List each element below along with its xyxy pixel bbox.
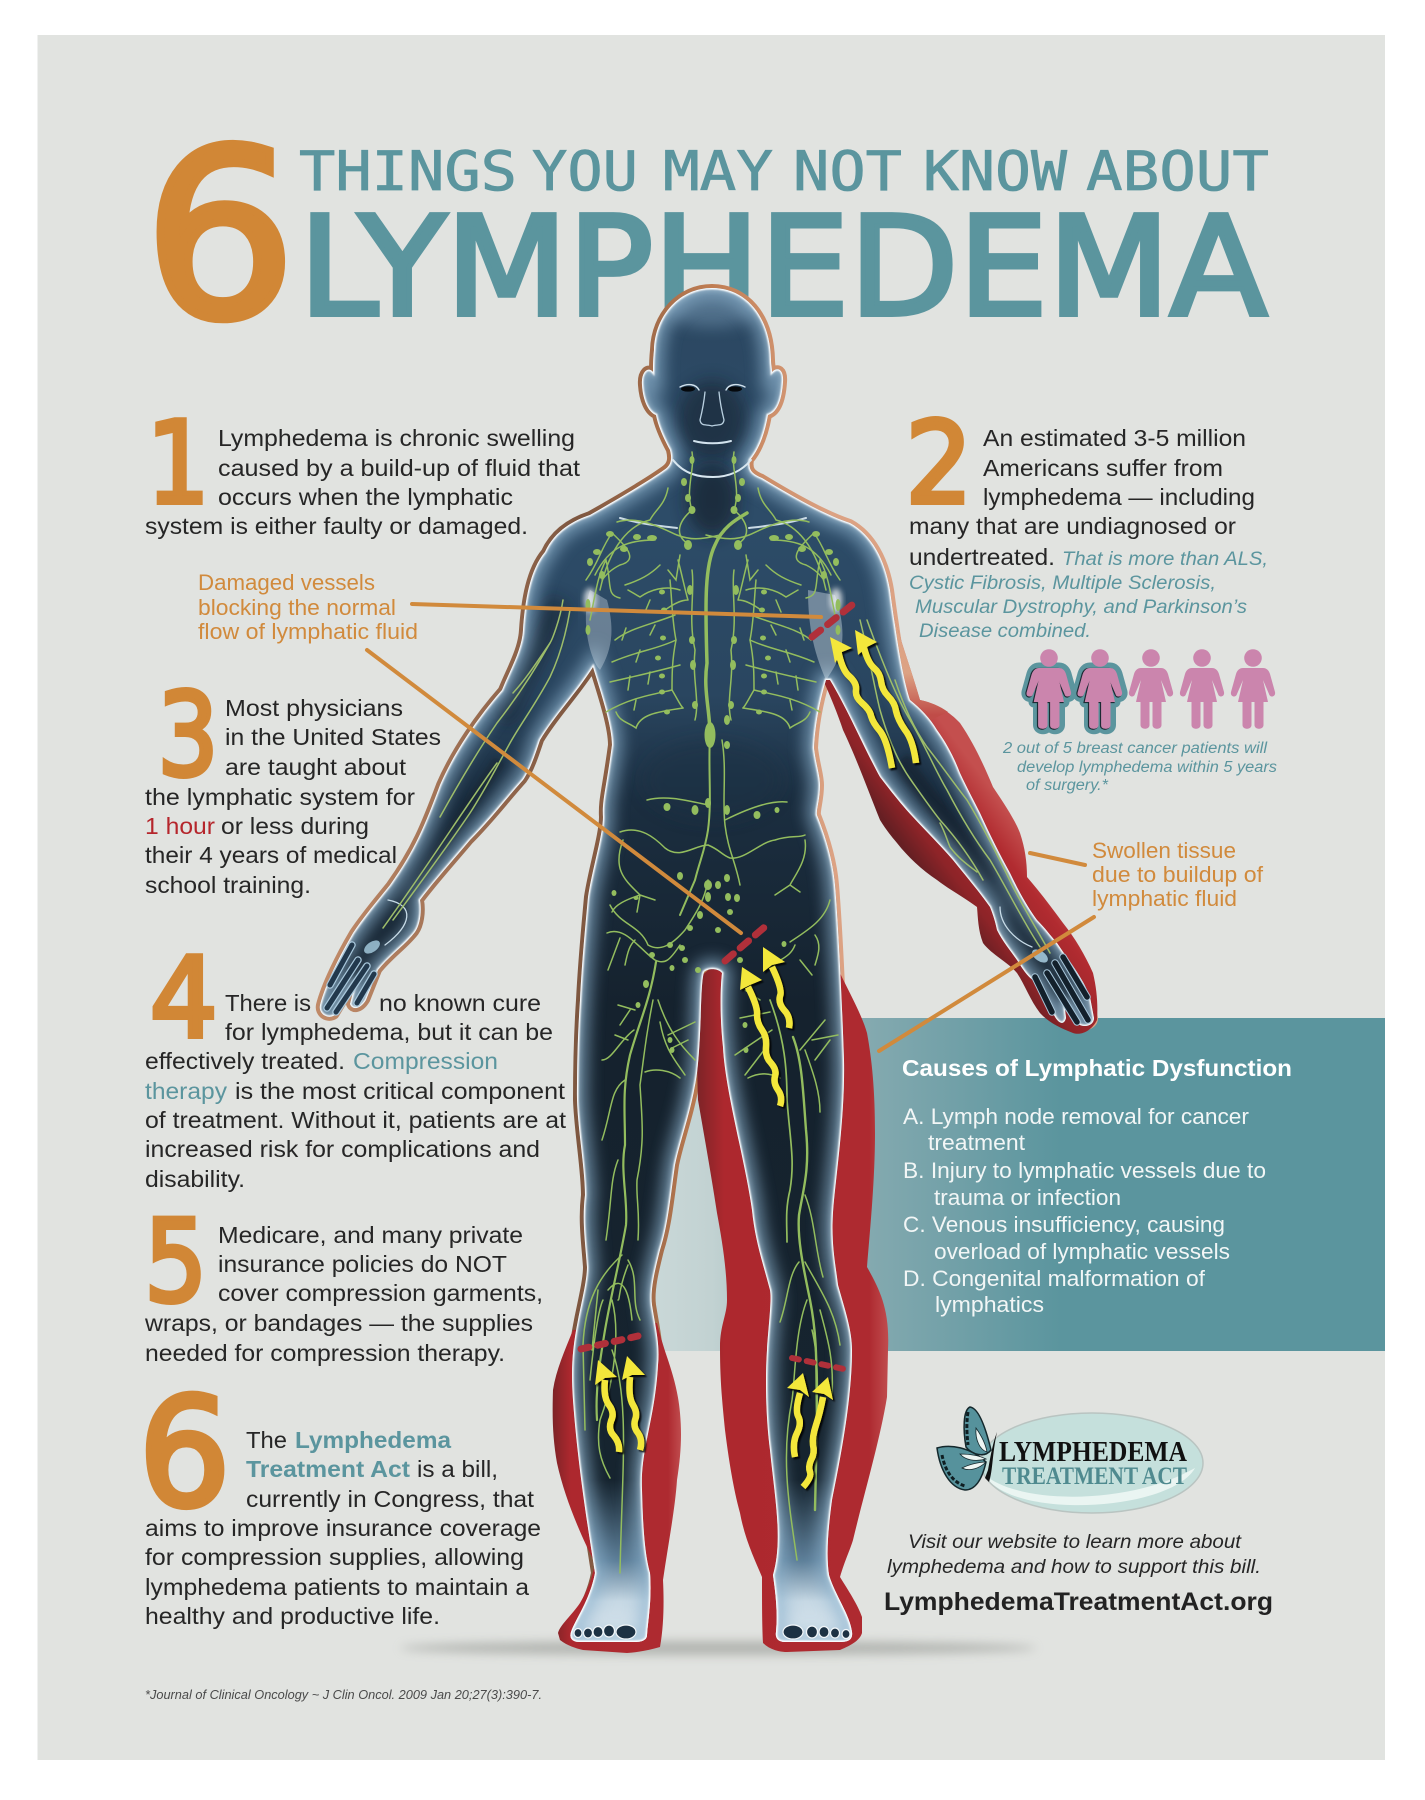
title — [144, 101, 1269, 371]
swollen arm — [823, 612, 1097, 1034]
blockage marker: groin — [725, 925, 767, 961]
title line one: ABOUT — [1086, 140, 1269, 203]
point 2 text: That is more than ALS, — [1062, 548, 1268, 570]
logo: lymphedema treatment act — [937, 1407, 1203, 1513]
numeral 3: 3 — [158, 669, 218, 803]
pictogram caption: develop lymphedema within 5 years — [1017, 759, 1277, 776]
right hand fingers — [1000, 907, 1088, 1022]
point 3 text: the lymphatic system for — [145, 784, 415, 810]
point 1 text — [145, 425, 580, 539]
yellow flow arrows — [595, 630, 916, 1487]
point 3 text: school training. — [145, 872, 311, 898]
human body illustration — [320, 283, 1097, 1653]
website url: LymphedemaTreatmentAct.org — [884, 1588, 1273, 1616]
panel: causes background — [650, 1018, 1385, 1351]
point 6 text: Lymphedema — [295, 1427, 452, 1453]
point 6 text: healthy and productive life. — [145, 1603, 440, 1629]
point 5 text — [144, 1222, 543, 1366]
face features — [620, 385, 806, 528]
point 2 text: Muscular Dystrophy, and Parkinson’s — [915, 596, 1247, 618]
point 5 — [144, 1196, 543, 1366]
swollen left leg — [553, 1323, 681, 1653]
callout: swollen tissue: lymphatic fluid — [1092, 886, 1237, 911]
point 2 text: many that are undiagnosed or — [909, 513, 1236, 539]
floor shadow — [400, 1641, 1036, 1655]
lymphatic network: trunk and lower body — [383, 513, 1050, 1573]
point 4 text: Compression — [353, 1048, 498, 1074]
lymphatic network: torso right half — [706, 452, 840, 728]
title line one: THINGS — [299, 140, 517, 203]
callout: swollen tissue: Swollen tissue — [1092, 838, 1236, 863]
pictogram: 2 out of 5 women — [1026, 649, 1275, 729]
point 4 text: increased risk for complications and — [145, 1136, 540, 1162]
point 2 text: An estimated 3-5 million — [983, 425, 1246, 451]
logo subtitle: TREATMENT ACT — [1002, 1463, 1187, 1490]
numeral 5: 5 — [144, 1196, 207, 1328]
point 3 text: are taught about — [225, 754, 406, 780]
point 3 text: their 4 years of medical — [145, 842, 397, 868]
point 6 text: Treatment Act — [246, 1456, 410, 1482]
point 1 text: occurs when the lymphatic — [218, 484, 513, 510]
point 3 text: 1 hour — [145, 813, 215, 839]
point 4 text: is the most critical component — [235, 1078, 565, 1104]
point 6 — [139, 1367, 541, 1629]
callout: damaged vessels: blocking the normal — [198, 595, 396, 620]
point 4 text: no known cure — [379, 990, 541, 1016]
point 6 text: currently in Congress, that — [246, 1486, 534, 1512]
title line one: KNOW — [923, 140, 1068, 203]
logo butterfly — [937, 1407, 997, 1490]
leader lines — [367, 604, 1094, 1051]
causes of lymphatic dysfunction text — [902, 1055, 1292, 1317]
causes list: trauma or infection — [934, 1185, 1121, 1210]
numeral 1: 1 — [147, 398, 210, 530]
point 2 text: undertreated. — [909, 544, 1055, 570]
callout: swollen tissue — [1092, 838, 1264, 911]
blockage marker: right calf — [792, 1358, 844, 1369]
point 6 text: is a bill, — [417, 1456, 498, 1482]
pictogram caption: 2 out of 5 breast cancer patients will — [1002, 740, 1268, 757]
point 4 text: of treatment. Without it, patients are at — [145, 1107, 566, 1133]
point 4 text: for lymphedema, but it can be — [225, 1019, 553, 1045]
call to action text: lymphedema and how to support this bill. — [887, 1556, 1261, 1578]
point 3 — [145, 669, 441, 898]
numeral 6: 6 — [139, 1367, 231, 1541]
logo oval — [981, 1413, 1203, 1513]
title numeral 6: 6 — [144, 101, 296, 371]
point 6 text: aims to improve insurance coverage — [145, 1515, 541, 1541]
point 3 text: or less during — [221, 813, 369, 839]
toes — [574, 1625, 850, 1639]
body silhouette — [320, 283, 1094, 1642]
point 1 text: system is either faulty or damaged. — [145, 513, 528, 539]
point 5 text: insurance policies do NOT — [218, 1251, 507, 1277]
title line two: LYMPHEDEMA — [299, 188, 1267, 348]
point 2 text — [909, 425, 1268, 642]
blockage marker: arm — [812, 601, 857, 637]
website call to action — [884, 1531, 1273, 1616]
causes list: overload of lymphatic vessels — [934, 1239, 1230, 1264]
causes list: B. Injury to lymphatic vessels due to — [903, 1158, 1266, 1183]
call to action text: Visit our website to learn more about — [908, 1531, 1243, 1553]
causes list — [903, 1104, 1266, 1317]
causes list: D. Congenital malformation of — [903, 1266, 1206, 1291]
point 4 text: disability. — [145, 1166, 245, 1192]
point 3 text: Most physicians — [225, 695, 403, 721]
title line one: NOT — [793, 140, 902, 203]
point 5 text: Medicare, and many private — [218, 1222, 523, 1248]
point 4 text: effectively treated. — [145, 1048, 345, 1074]
callout: damaged vessels: Damaged vessels — [198, 570, 375, 595]
point 6 text — [145, 1427, 541, 1629]
causes list: C. Venous insufficiency, causing — [903, 1212, 1225, 1237]
point 1 text: caused by a build-up of fluid that — [218, 455, 580, 481]
point 4 — [145, 934, 566, 1192]
title line one: YOU — [532, 140, 638, 203]
causes list: lymphatics — [935, 1292, 1044, 1317]
armpit highlights — [586, 590, 611, 670]
causes list: A. Lymph node removal for cancer — [903, 1104, 1249, 1129]
numeral 2: 2 — [906, 398, 972, 530]
point 2 text: Disease combined. — [919, 620, 1091, 642]
callout: damaged vessels: flow of lymphatic fluid — [198, 619, 418, 644]
point 2 text: Cystic Fibrosis, Multiple Sclerosis, — [909, 572, 1216, 594]
pictogram caption — [1002, 740, 1277, 794]
point 3 text — [145, 695, 441, 898]
point 5 text: wraps, or bandages — the supplies — [144, 1310, 533, 1336]
point 4 text: therapy — [145, 1078, 227, 1104]
point 2 text: Americans suffer from — [983, 455, 1223, 481]
point 1 — [145, 398, 580, 539]
point 2 text: lymphedema — including — [983, 484, 1255, 510]
logo wordmark: LYMPHEDEMA — [999, 1437, 1188, 1468]
blockage marker: left calf — [581, 1336, 638, 1349]
point 3 text: in the United States — [225, 724, 441, 750]
swollen right leg — [697, 913, 888, 1652]
causes heading: Causes of Lymphatic Dysfunction — [902, 1055, 1292, 1081]
point 6 text: The — [246, 1427, 287, 1453]
title line one — [299, 140, 1269, 203]
point 5 text: needed for compression therapy. — [145, 1340, 505, 1366]
point 4 text: There is — [225, 990, 311, 1016]
numeral 4: 4 — [150, 934, 218, 1064]
title line one: MAY — [663, 140, 773, 203]
footnote: *Journal of Clinical Oncology ~ J Clin Oncol. 2009 Jan 20;27(3):390-7. — [145, 1688, 542, 1702]
body outline — [320, 288, 1094, 1642]
body glow and rim light — [320, 283, 1094, 1642]
left hand fingers — [327, 900, 407, 1012]
point 1 text: Lymphedema is chronic swelling — [218, 425, 575, 451]
point 5 text: cover compression garments, — [218, 1280, 543, 1306]
callout: damaged vessels — [198, 570, 418, 644]
point 6 text: for compression supplies, allowing — [145, 1544, 524, 1570]
point 2 — [906, 398, 1268, 642]
lymphatic network: torso left half — [586, 452, 720, 728]
call to action text — [887, 1531, 1261, 1578]
callout: swollen tissue: due to buildup of — [1092, 862, 1264, 887]
causes list: treatment — [928, 1130, 1026, 1155]
point 6 text: lymphedema patients to maintain a — [145, 1574, 530, 1600]
pictogram caption: of surgery.* — [1026, 777, 1109, 794]
point 4 text — [145, 990, 566, 1192]
